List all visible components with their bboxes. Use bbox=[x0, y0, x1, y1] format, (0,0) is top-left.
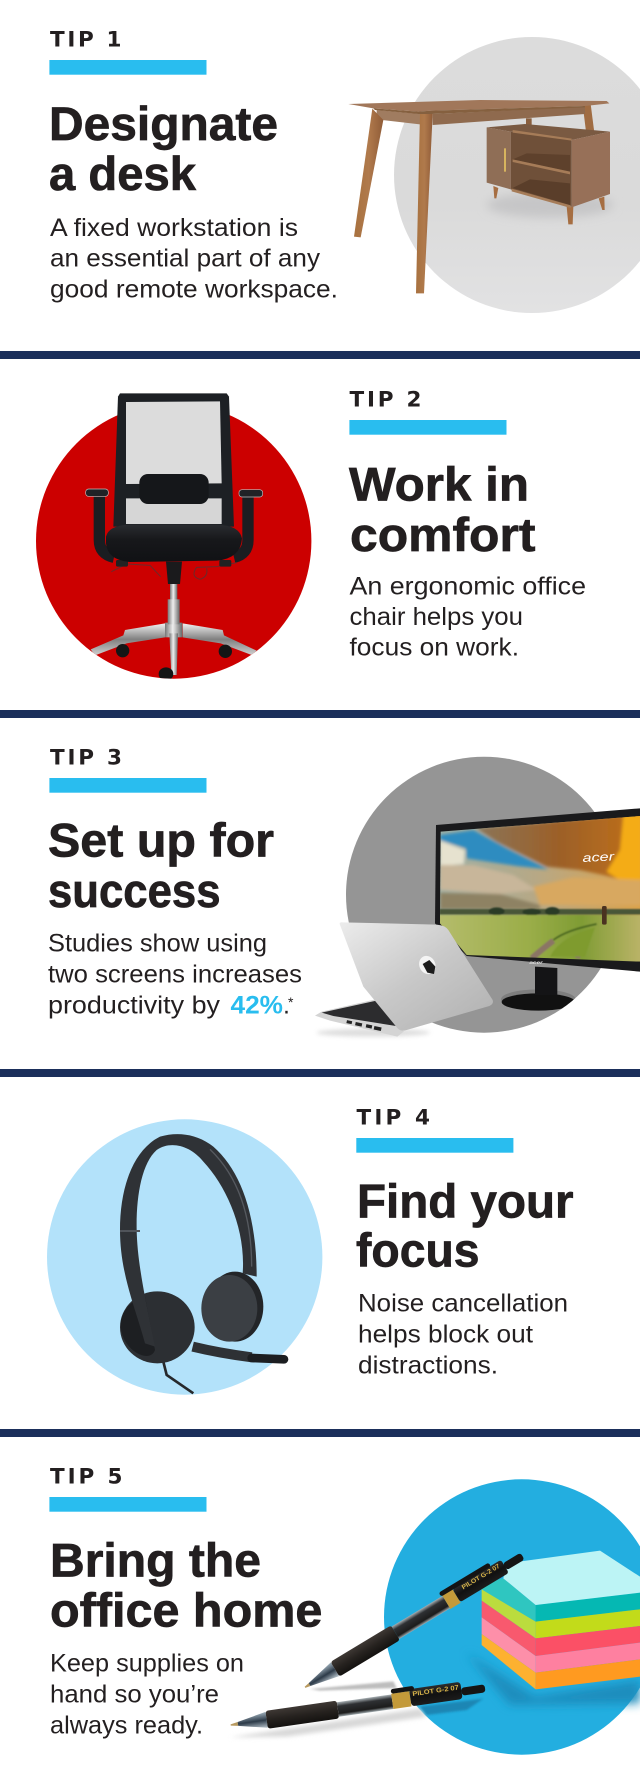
tip 5 body text: Keep supplies on bbox=[50, 1650, 244, 1678]
tip 2 body text: An ergonomic office bbox=[350, 572, 586, 600]
tip 1 body text: good remote workspace. bbox=[50, 276, 338, 304]
tip 5 heading bbox=[50, 1534, 322, 1637]
tip 1 heading bbox=[49, 97, 278, 200]
monitor bbox=[435, 808, 640, 1011]
icon: sticky note cube bbox=[482, 1551, 640, 1689]
tip 2 heading bbox=[349, 458, 536, 561]
tip 5 heading: office home bbox=[50, 1584, 322, 1637]
monitor: acer bbox=[529, 960, 544, 966]
laptop bbox=[315, 922, 493, 1037]
tip 5 accent bar bbox=[49, 1497, 207, 1512]
tip 5 heading: Bring the bbox=[50, 1534, 261, 1587]
tip 2 body text: focus on work. bbox=[350, 634, 519, 662]
tip 4 body text bbox=[358, 1290, 568, 1379]
tip 3 body text: two screens increases bbox=[48, 960, 302, 988]
icon: office chair bbox=[86, 393, 263, 681]
tip 3 body text bbox=[48, 930, 302, 1019]
tip 5 body text: always ready. bbox=[50, 1711, 203, 1739]
tip 4 accent bar bbox=[356, 1138, 513, 1153]
monitor: acer bbox=[582, 849, 616, 865]
tip 3 heading: success bbox=[48, 864, 220, 917]
tip 4 body text: distractions. bbox=[358, 1351, 498, 1379]
tip 3 body text: * bbox=[288, 994, 294, 1010]
tip 2 body text: chair helps you bbox=[350, 603, 523, 631]
tip 4 heading: focus bbox=[356, 1224, 480, 1277]
tip 1 body text: A fixed workstation is bbox=[50, 214, 298, 242]
panel: tip 5 bring the office home bbox=[49, 1465, 640, 1755]
tip 4 heading bbox=[356, 1174, 574, 1277]
tip 3 label: TIP 3 bbox=[50, 745, 122, 770]
tip 1 body text: an essential part of any bbox=[50, 245, 321, 273]
tip 2 heading: Work in bbox=[349, 458, 529, 511]
tip 3 body text: Studies show using bbox=[48, 930, 267, 958]
icon: monitor and laptop bbox=[315, 808, 640, 1037]
pen lower bbox=[229, 1676, 486, 1734]
tip 3 body text: 42% bbox=[230, 991, 283, 1019]
tip 1 label: TIP 1 bbox=[50, 28, 122, 53]
tip 2 accent bar bbox=[349, 420, 506, 435]
icon: headset bbox=[120, 1134, 284, 1393]
tip 3 body text: . bbox=[283, 991, 290, 1019]
icon: pens bbox=[229, 1546, 527, 1734]
tip 4 heading: Find your bbox=[357, 1174, 574, 1227]
tip 3 body text: productivity by bbox=[48, 991, 221, 1019]
tip 2 body text bbox=[350, 572, 586, 662]
tip 3 heading: Set up for bbox=[48, 814, 274, 867]
grey circle backdrop bbox=[346, 757, 622, 1033]
tip 3 heading bbox=[48, 814, 274, 917]
tip 5 body text bbox=[50, 1650, 244, 1739]
tip 2 heading: comfort bbox=[350, 508, 536, 561]
red circle backdrop bbox=[36, 403, 311, 679]
light blue circle backdrop bbox=[47, 1119, 322, 1395]
pen upper bbox=[299, 1546, 527, 1695]
tip 5 label: TIP 5 bbox=[50, 1465, 122, 1490]
panel: tip 1 designate a desk bbox=[49, 28, 640, 313]
pen lower: PILOT G-2 07 bbox=[412, 1684, 460, 1698]
tip 4 label: TIP 4 bbox=[356, 1105, 430, 1130]
pen upper: PILOT G-2 07 bbox=[461, 1563, 502, 1591]
tip 5 body text: hand so you’re bbox=[50, 1680, 219, 1708]
icon: cube shadow bbox=[230, 1653, 640, 1737]
tip 4 body text: helps block out bbox=[358, 1320, 533, 1348]
tip 2 label: TIP 2 bbox=[350, 388, 422, 413]
tip 4 body text: Noise cancellation bbox=[358, 1290, 568, 1318]
icon: wooden desk bbox=[348, 100, 613, 293]
tip 1 heading: a desk bbox=[49, 147, 197, 200]
panel: tip 4 find your focus bbox=[47, 1105, 574, 1395]
tip 1 body text bbox=[50, 214, 338, 304]
grey circle backdrop bbox=[394, 37, 640, 313]
tip 3 accent bar bbox=[49, 778, 207, 793]
tip 1 accent bar bbox=[49, 60, 207, 75]
panel: tip 3 set up for success bbox=[48, 745, 640, 1037]
blue circle backdrop bbox=[384, 1479, 640, 1755]
tip 1 heading: Designate bbox=[49, 97, 278, 150]
panel: tip 2 work in comfort bbox=[36, 388, 586, 681]
